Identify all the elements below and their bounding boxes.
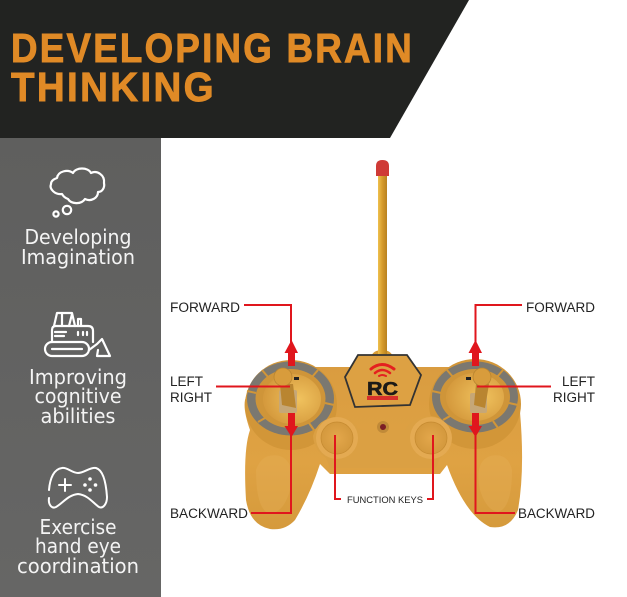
- control labels: RIGHT: [170, 390, 212, 405]
- icon: thought cloud: [51, 168, 104, 217]
- arrow: right forward: [468, 340, 482, 366]
- controller body: [245, 363, 522, 529]
- control labels: LEFT: [562, 374, 595, 389]
- arrow: right backward: [468, 413, 482, 437]
- text: exercise hand eye coordination: Exercise: [40, 515, 116, 539]
- title: THINKING: [11, 64, 216, 110]
- function button left: [316, 417, 358, 459]
- text: exercise hand eye coordination: [17, 515, 139, 578]
- text: developing imagination: Developing: [24, 225, 132, 249]
- text: improving cognitive abilities: abilities: [40, 404, 116, 428]
- function button right: [410, 417, 452, 459]
- control labels: BACKWARD: [170, 506, 248, 521]
- left dial: [245, 360, 337, 450]
- red guide lines and arrows: [216, 305, 551, 513]
- arrow: left backward: [284, 413, 298, 437]
- control labels: BACKWARD: [518, 506, 595, 521]
- text: exercise hand eye coordination: hand eye: [35, 534, 121, 558]
- text: developing imagination: Imagination: [21, 245, 135, 269]
- text: exercise hand eye coordination: coordination: [17, 554, 139, 578]
- right dial: [429, 359, 521, 449]
- control labels: LEFT: [170, 374, 203, 389]
- icon: bulldozer: [45, 313, 110, 356]
- icon: game controller: [49, 468, 107, 508]
- text: improving cognitive abilities: cognitive: [34, 384, 122, 408]
- RC badge: RC: [367, 378, 398, 399]
- title: [11, 25, 414, 110]
- RC badge: [345, 355, 421, 407]
- control labels: [170, 300, 595, 521]
- header banner: [0, 0, 469, 138]
- control labels: FORWARD: [526, 300, 595, 315]
- title: DEVELOPING BRAIN: [11, 25, 414, 71]
- text: improving cognitive abilities: [29, 365, 127, 428]
- remote controller: [245, 160, 522, 529]
- text: developing imagination: [21, 225, 135, 269]
- text: improving cognitive abilities: Improving: [29, 365, 127, 389]
- icon: wifi: [371, 364, 394, 376]
- panel: benefits sidebar: [0, 138, 161, 597]
- control labels: FUNCTION KEYS: [347, 495, 423, 506]
- control labels: FORWARD: [170, 300, 240, 315]
- grip highlights: [256, 455, 512, 514]
- antenna: [371, 160, 393, 357]
- function key base: [313, 416, 450, 468]
- arrow: left forward: [284, 340, 298, 366]
- control labels: RIGHT: [553, 390, 595, 405]
- indicator light: [377, 421, 389, 433]
